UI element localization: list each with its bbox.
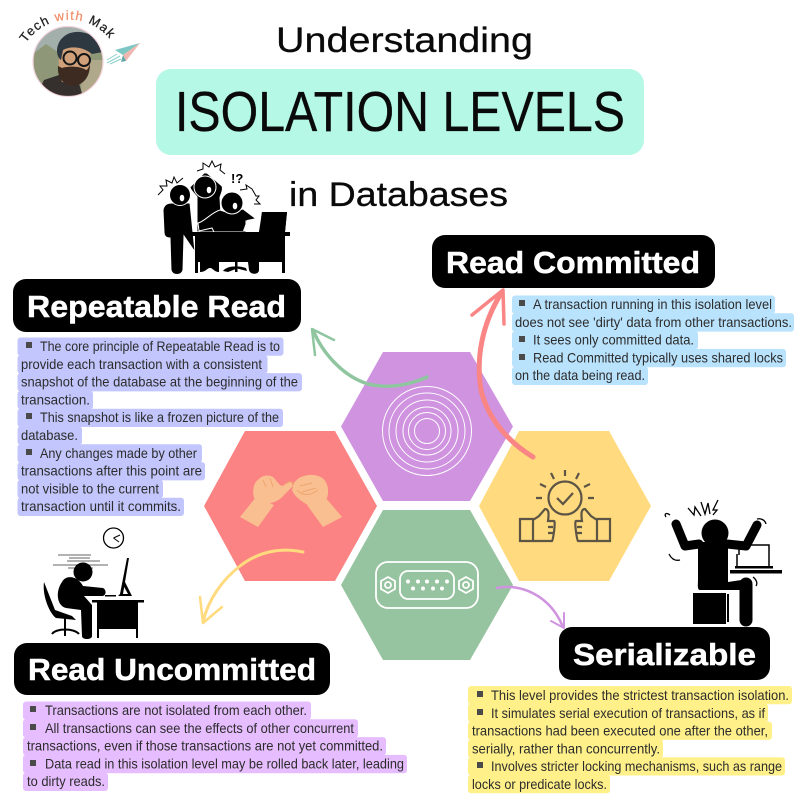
text block: Repeatable Read: transactions after this point are bbox=[21, 464, 202, 479]
text block: Repeatable Read: This snapshot is like a frozen picture of the bbox=[40, 410, 279, 425]
heading box: Serializable bbox=[559, 627, 770, 680]
title: Understanding: Understanding bbox=[276, 21, 533, 60]
arrow: red to Read Committed bbox=[472, 290, 533, 457]
hexagon: green with serial connector bbox=[341, 510, 513, 660]
text block: Read Committed bbox=[512, 296, 794, 385]
text block: Serializable bbox=[468, 686, 792, 793]
text block: Serializable: It simulates serial execution of transactions, as if bbox=[491, 706, 765, 721]
text block: Read Uncommitted: Data read in this isolation level may be rolled back later, leading bbox=[45, 756, 404, 771]
icon: stressed team at desk bbox=[158, 161, 290, 274]
text block: Repeatable Read: The core principle of Repeatable Read is to bbox=[40, 339, 280, 354]
text block: Serializable: Involves stricter locking mechanisms, such as range bbox=[491, 759, 782, 774]
title: in Databases: in Databases bbox=[289, 176, 508, 214]
text block: Serializable: serially, rather than concurrently. bbox=[472, 741, 660, 756]
text block: Serializable: This level provides the strictest transaction isolation. bbox=[491, 688, 789, 703]
heading box: Repeatable Read bbox=[13, 279, 301, 332]
title: Isolation Levels: ISOLATION LEVELS bbox=[175, 80, 625, 144]
text block: Read Committed: Read Committed typically uses shared locks bbox=[533, 350, 783, 365]
avatar portrait bbox=[34, 27, 102, 96]
text block: Repeatable Read: transaction. bbox=[21, 392, 90, 407]
text block: Repeatable Read: Any changes made by other bbox=[40, 446, 197, 461]
icon: serial port connector bbox=[376, 562, 478, 608]
text block: Read Uncommitted: Transactions are not isolated from each other. bbox=[45, 703, 307, 718]
text block: Repeatable Read: transaction until it commits. bbox=[21, 499, 181, 514]
title banner bbox=[156, 69, 644, 155]
text block: Read Uncommitted bbox=[23, 702, 407, 791]
heading box: Read Uncommitted: Read Uncommitted bbox=[28, 652, 316, 687]
heading box: Read Uncommitted bbox=[14, 643, 330, 695]
hexagon: yellow with thumbs up bbox=[479, 431, 651, 581]
icon: concentric circles bbox=[382, 386, 472, 476]
text block: Read Uncommitted: transactions, even if those transactions are not yet committed. bbox=[27, 739, 383, 754]
text block: Read Committed: A transaction running in this isolation level bbox=[533, 297, 772, 312]
arrow: purple to Serializable bbox=[497, 587, 564, 628]
logo lettering: Tech with Mak bbox=[18, 10, 115, 40]
icon: wall clock bbox=[104, 528, 124, 548]
arrow: yellow to Read Uncommitted bbox=[200, 550, 303, 623]
heading box: Read Committed: Read Committed bbox=[446, 245, 700, 280]
icon: pinky promise hands bbox=[240, 475, 342, 527]
hexagon: purple with concentric circles bbox=[341, 352, 513, 501]
heading box: Read Committed bbox=[432, 235, 715, 288]
logo: Tech with Mak bbox=[18, 10, 140, 98]
text block: Read Committed: does not see 'dirty' data from other transactions. bbox=[515, 315, 792, 330]
heading box: Repeatable Read: Repeatable Read bbox=[27, 289, 286, 324]
icon: paper plane bbox=[107, 43, 140, 64]
text block: Repeatable Read: snapshot of the database at the beginning of the bbox=[21, 375, 298, 390]
text block: Repeatable Read: database. bbox=[21, 428, 78, 443]
arrow: green to Repeatable Read bbox=[312, 329, 427, 386]
text block: Repeatable Read bbox=[18, 338, 302, 516]
text block: Read Committed: It sees only committed data. bbox=[533, 333, 694, 348]
heading box: Serializable: Serializable bbox=[573, 637, 756, 672]
text block: Read Uncommitted: All transactions can see the effects of other concurrent bbox=[45, 721, 354, 736]
text block: Read Committed: on the data being read. bbox=[515, 368, 645, 383]
text block: Read Uncommitted: to dirty reads. bbox=[27, 774, 105, 789]
hexagon: red with pinky promise hands bbox=[204, 431, 377, 581]
text block: Serializable: locks or predicate locks. bbox=[472, 777, 607, 792]
icon: rushed worker at desk with clock bbox=[44, 528, 144, 639]
text block: Repeatable Read: not visible to the current bbox=[21, 481, 159, 496]
icon: thumbs up and check sun bbox=[520, 470, 610, 541]
text block: Serializable: transactions had been executed one after the other, bbox=[472, 724, 768, 739]
icon: stressed team at desk: !? bbox=[231, 171, 243, 186]
text block: Repeatable Read: provide each transaction with a consistent bbox=[21, 357, 262, 372]
icon: frustrated person at laptop bbox=[665, 500, 782, 624]
